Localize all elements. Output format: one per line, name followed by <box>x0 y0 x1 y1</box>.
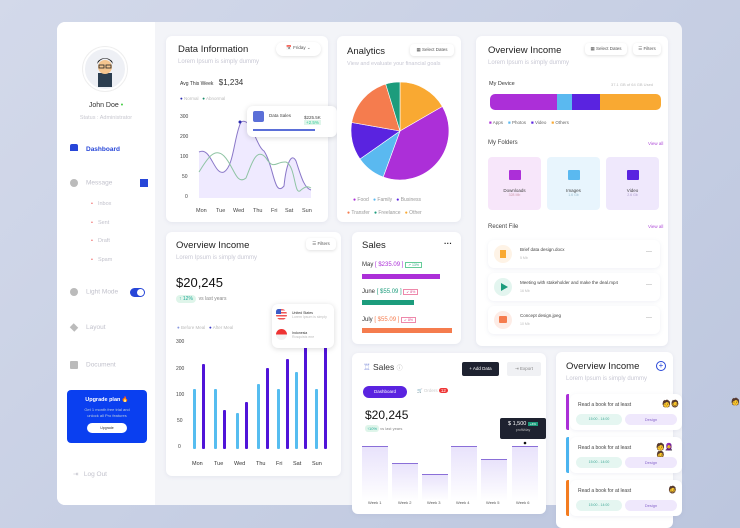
pie legend <box>347 197 422 216</box>
country popup <box>272 304 334 348</box>
panel: overview income top right: My Device <box>489 81 515 87</box>
panel: overview income top right: ☰ Filters <box>638 46 656 51</box>
panel: overview income top right: Video <box>627 188 638 193</box>
weekly bars <box>362 442 538 505</box>
panel: sales small: July [ $55.09 ] ↙ 8% <box>362 317 413 323</box>
line chart: Mon <box>196 208 207 214</box>
panel: sales bottom: ↑10% vs last years <box>367 426 402 431</box>
panel: overview income bars: ● Before Meal ● After Meal <box>177 325 233 330</box>
panel: overview income top right: ▦ Select Dates <box>590 46 622 51</box>
bar chart: 50 <box>177 418 183 424</box>
bar chart <box>176 339 327 467</box>
bar chart: Sat <box>293 461 302 467</box>
bar chart: Mon <box>192 461 203 467</box>
text: 15:00 - 14:00 <box>589 503 609 507</box>
upgrade box: Upgrade <box>100 426 114 430</box>
file rows <box>488 240 660 268</box>
panel: overview income top right: Overview Income <box>488 45 561 56</box>
panel: overview income bars: ☰ Filters <box>312 241 330 246</box>
bar chart: 300 <box>176 339 185 345</box>
line chart: Thu <box>253 208 262 214</box>
task cards: Design <box>645 417 657 422</box>
weekly bars: Week 3 <box>427 500 441 505</box>
country popup: United States <box>292 311 313 315</box>
line chart: 200 <box>180 134 189 140</box>
upgrade box: unlock all Pro features <box>87 413 127 418</box>
task cards: 15:00 - 14:00 <box>589 417 609 421</box>
line chart: Wed <box>233 208 244 214</box>
layout <box>70 323 106 332</box>
bar chart: Sun <box>312 461 322 467</box>
country popup: Lorem Ipsum is simply <box>292 315 327 319</box>
text: 15:00 - 14:00 <box>589 460 609 464</box>
panel: sales small: June [ $55.09 ] ↙ 8% <box>362 289 415 295</box>
panel: overview income bars: $20,245 <box>176 275 223 290</box>
upgrade box: Get 1 month free trial and <box>84 407 130 412</box>
task cards: Read a book for at least <box>578 402 631 408</box>
line chart: Tue <box>216 208 225 214</box>
tooltip dark <box>500 418 546 439</box>
text: 🧑🧕🧔 <box>656 444 673 459</box>
nav dashboard: Dashboard <box>86 146 120 153</box>
panel: sales bottom: 🛒 Orders 12 <box>417 388 446 393</box>
panel: sales bottom: ♖ Sales ⓘ <box>363 362 403 372</box>
panel: overview income bars: Overview Income <box>176 240 249 251</box>
panel: data information: ● Normal ● Abnormal <box>180 96 225 101</box>
panel: overview income top right: Meeting with stakeholder and make the deal.mp4 <box>520 280 618 285</box>
status: Status : Administrator <box>80 115 132 121</box>
panel: data information: Data Information <box>178 44 248 55</box>
text: Design <box>645 503 657 508</box>
text: Design <box>645 460 657 465</box>
folders: Downloads <box>503 188 526 193</box>
task cards: 🧑🧔 <box>662 401 679 408</box>
panel: data information: 📅 Friday ⌄ <box>286 45 311 50</box>
bar chart: Thu <box>256 461 265 467</box>
panel: overview income top right: 37.1 GB of 64 GB Used <box>611 82 653 87</box>
panel: sales bottom <box>352 353 546 514</box>
line chart: 50 <box>182 174 188 180</box>
panel: overview income top right: ··· <box>646 282 652 288</box>
nav message: Message <box>86 180 112 187</box>
storage bar <box>490 94 661 110</box>
panel: overview income top right: ■ Apps ■ Photos ■ Video ■ Others <box>489 120 569 125</box>
upgrade box: Upgrade plan 🔥 <box>85 397 129 403</box>
task cards <box>566 394 682 431</box>
bar chart: 0 <box>178 444 181 450</box>
bar chart: Tue <box>214 461 223 467</box>
weekly bars: Week 5 <box>486 500 500 505</box>
tooltip <box>247 106 337 137</box>
sidebar: Draft <box>98 238 110 244</box>
tooltip: Data Sales <box>269 113 291 118</box>
panel: overview income tasks <box>556 352 673 528</box>
pie legend: ● Transfer ● Freelance ● Other <box>347 210 422 216</box>
line chart: Fri <box>271 208 277 214</box>
submenu: Inbox <box>98 201 111 207</box>
light mode: Light Mode <box>86 289 118 296</box>
sidebar: Spam <box>98 257 112 263</box>
weekly bars: Week 2 <box>398 500 412 505</box>
panel: sales small: Sales <box>362 240 386 251</box>
sidebar: Sent <box>98 220 109 226</box>
file rows: Brief data design.docx <box>520 247 565 252</box>
panel: overview income bars: Lorem Ipsum is simply dummy <box>176 255 257 261</box>
panel: overview income top right: Images <box>566 188 581 193</box>
panel: sales bottom: Dashboard <box>374 389 396 394</box>
pie chart <box>351 82 449 180</box>
layout: Layout <box>86 324 106 331</box>
line chart: Sat <box>285 208 294 214</box>
panel: sales bottom: ⇥ Export <box>515 366 533 371</box>
bar chart: Fri <box>276 461 282 467</box>
line chart: Sun <box>302 208 312 214</box>
line chart <box>180 114 312 214</box>
panel: analytics: ▦ Select Dates <box>416 47 448 52</box>
text: 🧔 <box>668 487 677 494</box>
bar chart: 100 <box>176 392 185 398</box>
bar chart: 200 <box>176 366 185 372</box>
sidebar <box>57 22 155 505</box>
panel: data information: Lorem Ipsum is simply dummy <box>178 59 259 65</box>
logout: ⇥ Log Out <box>73 471 107 478</box>
panel: overview income top right: My Folders <box>488 140 518 146</box>
main container <box>57 22 682 505</box>
tooltip: $225.5K +2.5% <box>304 115 321 125</box>
panel: overview income top right: 10 Mb <box>520 322 530 326</box>
file rows: 5 Mb <box>520 256 528 260</box>
line chart: 0 <box>185 194 188 200</box>
panel: overview income bars: ↑ 12% vs last years <box>179 296 226 302</box>
panel: sales bottom: + Add Data <box>469 366 492 371</box>
panel: overview income tasks: Overview Income <box>566 361 639 372</box>
panel: overview income tasks: Lorem Ipsum is simply dummy <box>566 376 647 382</box>
nav message <box>70 179 148 187</box>
tooltip dark: profit/day <box>516 428 530 432</box>
panel: sales bottom: $20,245 <box>365 408 408 422</box>
upgrade box <box>67 390 147 443</box>
pie legend: ● Food ● Family ● Business <box>353 197 421 203</box>
panel: data information <box>166 36 328 222</box>
panel: overview income top right: Lorem Ipsum is simply dummy <box>488 60 569 66</box>
panel: overview income top right: ··· <box>646 315 652 321</box>
country popup: Indonesia <box>292 331 307 335</box>
panel: data information: Avg This Week $1,234 <box>180 78 243 87</box>
bar chart: Wed <box>234 461 245 467</box>
stray avatar: 🧑 <box>731 399 740 406</box>
panel: overview income top right: 2.6 Gb <box>627 193 638 197</box>
document <box>70 361 116 369</box>
panel: overview income top right: 1.6 Gb <box>568 193 579 197</box>
line chart: 100 <box>180 154 189 160</box>
panel: overview income top right: View all <box>648 224 663 229</box>
panel: sales small: May [ $235.09 ] ↗ 13% <box>362 262 419 268</box>
panel: overview income top right: Recent File <box>488 224 518 230</box>
weekly bars: Week 6 <box>516 500 530 505</box>
text: Read a book for at least <box>578 488 631 494</box>
weekly bars: Week 1 <box>368 500 382 505</box>
text: Read a book for at least <box>578 445 631 451</box>
toggle <box>130 288 145 297</box>
panel: analytics <box>337 36 461 222</box>
tooltip dark: $ 1,500 +4% <box>508 421 536 427</box>
panel: analytics: Analytics <box>347 46 385 57</box>
country popup: Rosquists ene <box>292 335 314 339</box>
panel: overview income top right: 16 Mb <box>520 289 530 293</box>
nav dashboard <box>70 144 120 153</box>
panel: overview income top right: View all <box>648 141 663 146</box>
folders <box>488 157 541 210</box>
panel: overview income bars <box>166 232 341 476</box>
panel: sales small <box>352 232 461 344</box>
weekly bars: Week 4 <box>456 500 470 505</box>
light mode <box>70 288 118 296</box>
folders: 328 Mb <box>509 193 520 197</box>
name: John Doe • <box>89 102 123 109</box>
avatar <box>83 47 127 91</box>
line chart: 300 <box>180 114 189 120</box>
file rows: ··· <box>646 249 652 255</box>
panel: overview income top right: Concept design.jpeg <box>520 313 561 318</box>
panel: overview income top right <box>476 36 668 346</box>
panel: analytics: View and evaluate your financial goals <box>347 61 440 67</box>
panel: overview income tasks: + <box>659 361 663 370</box>
document: Document <box>86 362 116 369</box>
panel: sales small: ··· <box>444 239 452 248</box>
